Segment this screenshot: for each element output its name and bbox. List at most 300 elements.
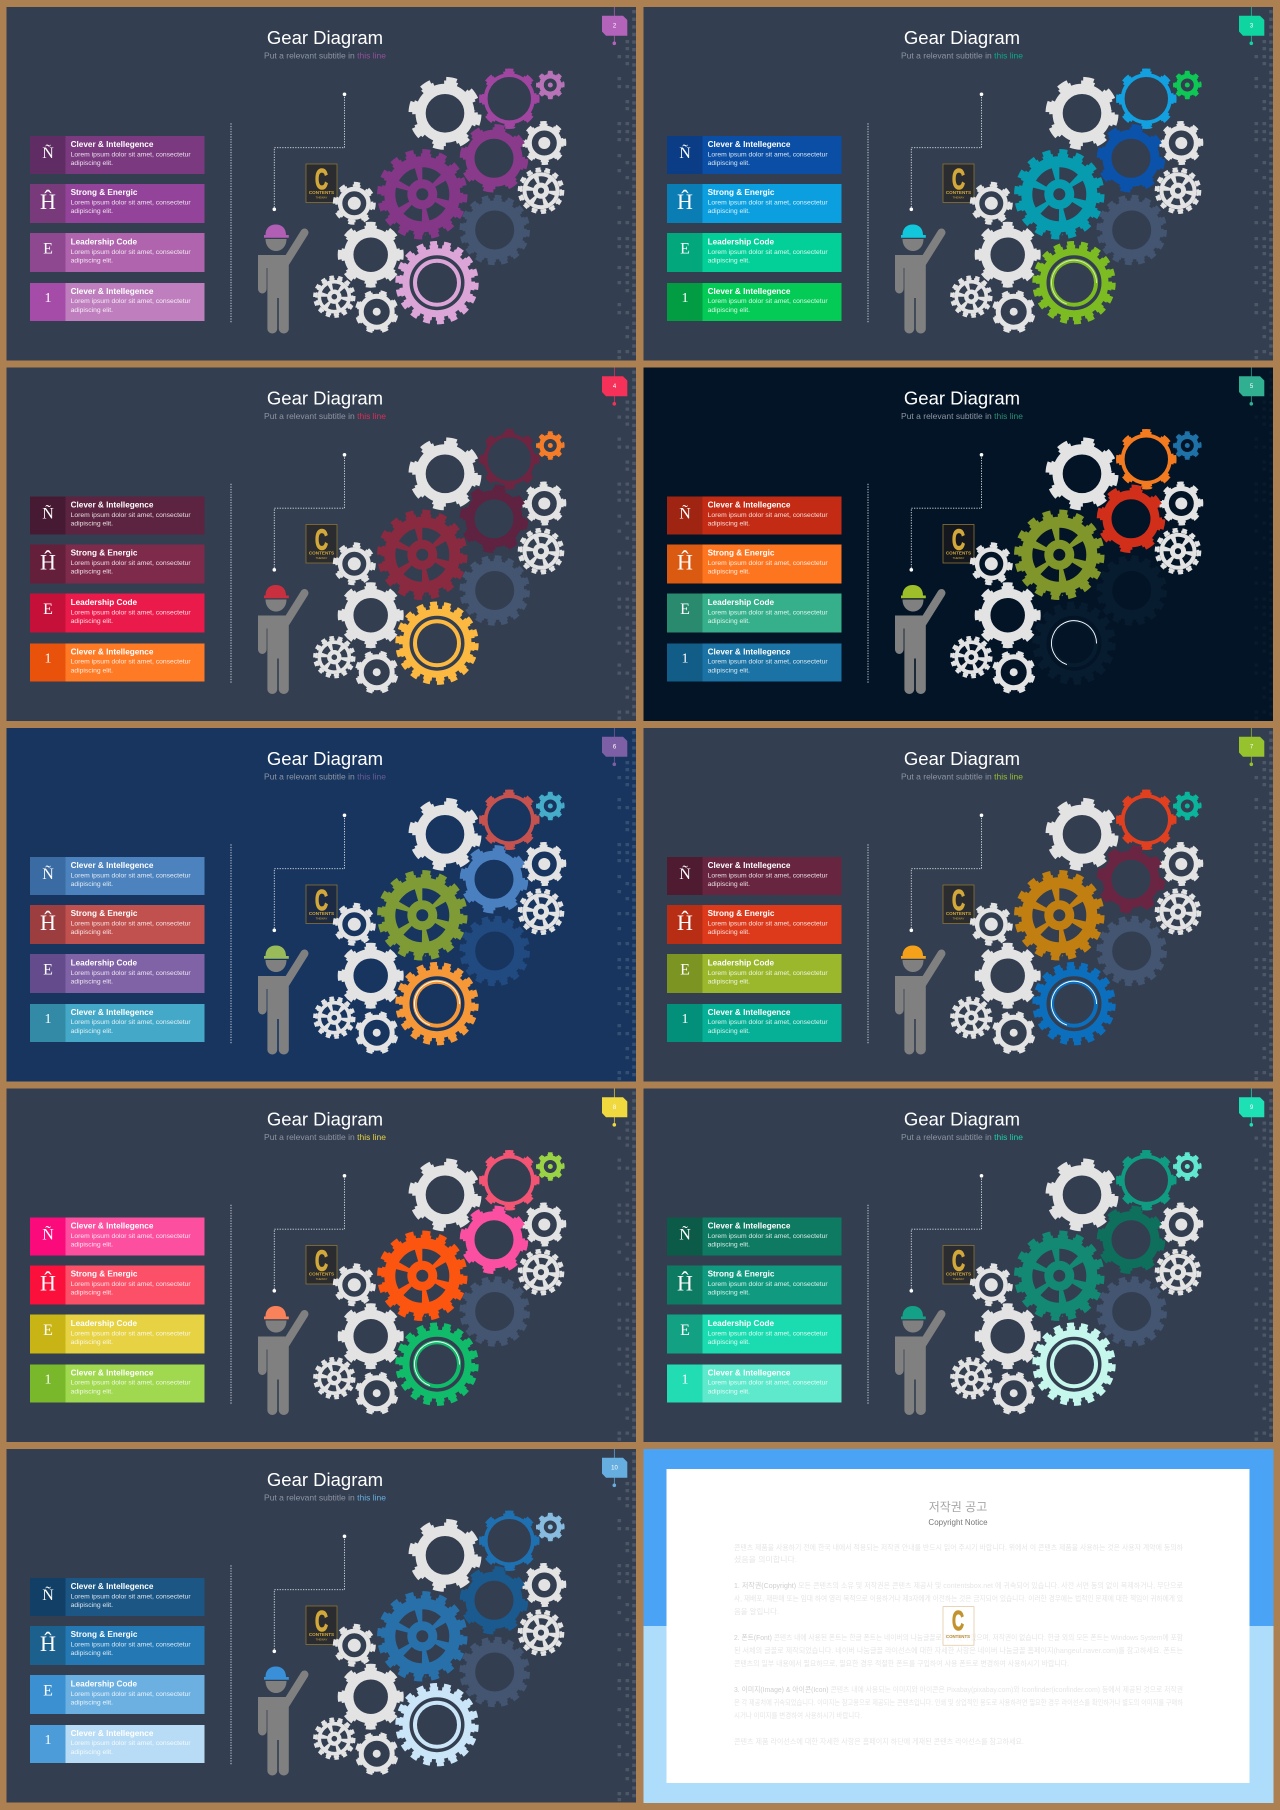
title: Gear Diagram [267, 1469, 383, 1490]
list item 3: adipiscing elit. [708, 1339, 750, 1346]
slide background [6, 728, 636, 1082]
notice body text: 셨음을 의미합니다. [734, 1554, 797, 1564]
centre logo: CONTENTS [946, 1634, 970, 1639]
list item 2 [30, 905, 204, 944]
dotted divider and leader [231, 814, 346, 1044]
list item 2: Strong & Energic [71, 1270, 138, 1278]
list item 1: Ñ [679, 504, 691, 522]
list item 4: 1 [44, 1372, 52, 1388]
list item 1: Clever & Intellegence [71, 1222, 154, 1230]
list item 1: adipiscing elit. [71, 160, 113, 167]
list item 1: adipiscing elit. [708, 1242, 750, 1248]
white notice card [666, 1469, 1250, 1783]
list item 1: Ñ [42, 1586, 54, 1604]
list item 4: Lorem ipsum dolor sit amet, consectetur [708, 1019, 828, 1026]
list item 4: Lorem ipsum dolor sit amet, consectetur [71, 298, 191, 305]
list item 2: Lorem ipsum dolor sit amet, consectetur [71, 920, 191, 928]
list item 3: adipiscing elit. [71, 1339, 113, 1346]
slide background [6, 368, 636, 721]
list item 4: adipiscing elit. [71, 1389, 113, 1396]
list item 1: adipiscing elit. [708, 881, 750, 888]
list item 4: Clever & Intellegence [708, 648, 791, 656]
panel: slide 2 purple [6, 7, 636, 360]
list item 2: adipiscing elit. [71, 1290, 113, 1296]
logo: CONTENTS [309, 550, 334, 556]
list item 1: Ñ [679, 1226, 691, 1244]
list item 3: Lorem ipsum dolor sit amet, consectetur [71, 609, 191, 616]
list item 3: Leadership Code [708, 598, 774, 607]
list item 3: Leadership Code [708, 958, 774, 967]
list item 3: adipiscing elit. [708, 618, 750, 625]
logo: THEWAY [953, 916, 964, 920]
list item 1 [30, 1578, 204, 1616]
subtitle: Put a relevant subtitle in this line [264, 1492, 386, 1502]
gear cluster [315, 1149, 567, 1417]
list item 1: Ñ [679, 865, 691, 883]
list item 2: Strong & Energic [71, 548, 138, 558]
list item 3: adipiscing elit. [71, 618, 113, 625]
list item 2: Lorem ipsum dolor sit amet, consectetur [708, 920, 828, 928]
slide background [644, 728, 1273, 1082]
list item 3: adipiscing elit. [71, 1700, 113, 1706]
list item 4: 1 [44, 1733, 52, 1748]
list item 4 [667, 1004, 842, 1042]
subtitle: Put a relevant subtitle in this line [901, 50, 1023, 60]
list item 1: Ñ [42, 504, 54, 522]
list item 3: E [43, 962, 53, 978]
list item 3: Lorem ipsum dolor sit amet, consectetur [71, 249, 191, 256]
page tag: 5 [1250, 384, 1254, 390]
list item 3: adipiscing elit. [71, 978, 113, 986]
worker figure with hard hat [258, 1666, 304, 1776]
list item 4: adipiscing elit. [708, 668, 750, 675]
notice body text: 음을 알립니다. [734, 1607, 779, 1616]
list item 2 [667, 905, 842, 944]
list item 4: Clever & Intellegence [708, 1008, 791, 1017]
list item 3 [667, 233, 842, 272]
notice body text [734, 1542, 1183, 1746]
panel: slide 9 teal [644, 1088, 1273, 1442]
logo: C [315, 1246, 328, 1278]
logo: C [952, 524, 965, 556]
list item 4: Lorem ipsum dolor sit amet, consectetur [71, 1019, 191, 1026]
page tag: 9 [1250, 1105, 1254, 1111]
slide background [6, 1449, 636, 1802]
list item 1 [667, 496, 842, 534]
list item 4: adipiscing elit. [71, 668, 113, 675]
list item 2 [667, 184, 842, 223]
list item 1: Clever & Intellegence [71, 1582, 154, 1591]
list item 4: adipiscing elit. [71, 307, 113, 314]
gear cluster [315, 67, 567, 335]
list item 2: Strong & Energic [708, 548, 775, 558]
list item 4 [30, 283, 204, 321]
notice body text: 2. 폰트(Font) 콘텐츠 내에 사용된 폰트는 한글 폰트는 네이버의 나눔글꼴로 제작되어 있으며, 저작권이 없습니다. 한글 외의 모든 폰트는 Windows System에 포함 [734, 1632, 1183, 1642]
logo: CONTENTS [946, 911, 971, 916]
list item 1: Clever & Intellegence [71, 140, 154, 149]
list item 2: Strong & Energic [71, 909, 138, 918]
list item 4: 1 [44, 652, 52, 666]
list item 3 [30, 233, 204, 272]
worker figure with hard hat [258, 585, 304, 694]
dot pattern [618, 370, 634, 720]
subtitle: Put a relevant subtitle in this line [901, 411, 1023, 421]
list item 2: Ĥ [40, 550, 56, 574]
list item 1 [667, 1218, 842, 1256]
list item 3: Leadership Code [708, 1319, 774, 1328]
list item 4: Lorem ipsum dolor sit amet, consectetur [71, 1380, 191, 1387]
worker figure with hard hat [258, 224, 304, 334]
list item 4: Lorem ipsum dolor sit amet, consectetur [708, 659, 828, 666]
gear cluster [952, 1149, 1204, 1417]
list item 2: adipiscing elit. [708, 929, 750, 936]
list item 2: Ĥ [677, 189, 693, 214]
list item 3: E [680, 240, 690, 258]
slide background [644, 1088, 1273, 1442]
list item 4: adipiscing elit. [71, 1028, 113, 1035]
list item 2: Strong & Energic [71, 1630, 138, 1639]
list item 2 [30, 1266, 204, 1304]
list item 2 [667, 1266, 842, 1304]
list item 1 [30, 496, 204, 534]
list item 1: Clever & Intellegence [708, 500, 791, 510]
worker figure with hard hat [258, 1306, 304, 1415]
list item 1: adipiscing elit. [708, 520, 750, 528]
logo: CONTENTS [309, 190, 334, 195]
list item 3: adipiscing elit. [708, 258, 750, 264]
list item 2 [30, 1626, 204, 1665]
list item 2: Lorem ipsum dolor sit amet, consectetur [71, 560, 191, 567]
list item 2: Lorem ipsum dolor sit amet, consectetur [71, 1281, 191, 1288]
title: Gear Diagram [267, 748, 383, 769]
title: Gear Diagram [904, 1108, 1020, 1130]
notice heading: 저작권 공고 [929, 1500, 987, 1514]
list item 1: Lorem ipsum dolor sit amet, consectetur [71, 152, 191, 158]
subtitle: Put a relevant subtitle in this line [264, 411, 386, 421]
list item 4: Clever & Intellegence [71, 1368, 154, 1378]
panel: slide 6 royal blue [6, 728, 636, 1082]
list item 2: Ĥ [677, 910, 693, 935]
list item 2: Ĥ [40, 910, 56, 935]
list item 3: Leadership Code [71, 237, 137, 246]
list item 3: E [43, 601, 53, 618]
dotted divider and leader [868, 92, 983, 323]
list item 3: Leadership Code [71, 1679, 137, 1688]
list item 3: E [680, 1322, 690, 1339]
list item 1 [30, 857, 204, 895]
list item 4: 1 [682, 1012, 688, 1027]
list item 4: Clever & Intellegence [708, 287, 791, 296]
list item 4: 1 [682, 1372, 688, 1388]
list item 4 [667, 1364, 842, 1402]
list item 1: adipiscing elit. [71, 1602, 113, 1609]
list item 3: Leadership Code [71, 1319, 137, 1328]
list item 2: Ĥ [677, 550, 693, 574]
title: Gear Diagram [904, 748, 1020, 769]
list item 1: adipiscing elit. [71, 881, 113, 888]
panel: slide 10 blue [6, 1449, 636, 1802]
list item 2: Lorem ipsum dolor sit amet, consectetur [708, 200, 828, 206]
list item 1: Ñ [42, 865, 54, 883]
page tag: 7 [1250, 744, 1254, 750]
dotted divider and leader [231, 453, 346, 683]
logo [306, 1606, 337, 1644]
list item 4: Lorem ipsum dolor sit amet, consectetur [708, 298, 828, 305]
logo: C [315, 885, 328, 917]
list item 2 [30, 184, 204, 223]
dotted divider and leader [868, 453, 983, 683]
list item 1: Lorem ipsum dolor sit amet, consectetur [708, 512, 828, 519]
logo: CONTENTS [946, 550, 971, 556]
page tag [1239, 368, 1264, 406]
title: Gear Diagram [267, 27, 383, 48]
list item 3 [667, 594, 842, 632]
list item 4: Clever & Intellegence [708, 1368, 791, 1378]
subtitle: Put a relevant subtitle in this line [264, 1132, 386, 1142]
logo [306, 164, 337, 202]
logo: CONTENTS [309, 911, 334, 916]
list item 1: Clever & Intellegence [708, 140, 791, 149]
page tag: 2 [613, 24, 617, 30]
list item 3 [667, 954, 842, 993]
list item 4: Lorem ipsum dolor sit amet, consectetur [71, 659, 191, 666]
dot pattern [1254, 1092, 1271, 1441]
page tag [602, 1449, 627, 1487]
dotted divider and leader [231, 1534, 346, 1765]
page tag: 4 [613, 384, 617, 390]
list item 3: Lorem ipsum dolor sit amet, consectetur [708, 1330, 828, 1337]
list item 1: Lorem ipsum dolor sit amet, consectetur [71, 512, 191, 519]
list item 2: Ĥ [677, 1270, 693, 1296]
logo [943, 164, 974, 202]
list item 4 [30, 1004, 204, 1042]
panel: slide 8 vivid [6, 1088, 636, 1442]
list item 3: E [680, 962, 690, 978]
worker figure with hard hat [895, 946, 942, 1054]
gear cluster [952, 428, 1204, 696]
page tag: 10 [611, 1466, 618, 1472]
list item 3 [30, 1675, 204, 1714]
notice body text: 1. 저작권(Copyright) 모든 콘텐츠의 소유 및 저작권은 콘텐츠 제공사 및 contentsbox.net 에 귀속되어 있습니다. 사전 서면 동의 없이 복제하거나, 무단으로 [734, 1580, 1183, 1590]
logo: CONTENTS [946, 1272, 971, 1276]
list item 3: Leadership Code [71, 958, 137, 967]
page tag: 8 [613, 1105, 617, 1111]
list item 1: adipiscing elit. [71, 1242, 113, 1248]
list item 4 [667, 283, 842, 321]
list item 4 [30, 1364, 204, 1402]
list item 3: Lorem ipsum dolor sit amet, consectetur [708, 970, 828, 977]
list item 3: adipiscing elit. [708, 978, 750, 986]
slide background [644, 368, 1273, 721]
dotted divider and leader [868, 1174, 983, 1404]
list item 2: Lorem ipsum dolor sit amet, consectetur [71, 1642, 191, 1648]
list item 2: adipiscing elit. [71, 929, 113, 936]
worker figure with hard hat [895, 224, 942, 334]
list item 3: E [680, 601, 690, 618]
worker figure with hard hat [258, 946, 304, 1054]
slide background [6, 1088, 636, 1442]
list item 3: adipiscing elit. [71, 258, 113, 264]
list item 3: Lorem ipsum dolor sit amet, consectetur [71, 970, 191, 977]
list item 3: Lorem ipsum dolor sit amet, consectetur [71, 1691, 191, 1698]
list item 2: Ĥ [40, 189, 56, 214]
list item 3: Leadership Code [708, 237, 774, 246]
list item 4 [667, 644, 842, 682]
background lower light blue [644, 1626, 1274, 1803]
list item 1: adipiscing elit. [71, 520, 113, 528]
logo: CONTENTS [309, 1632, 334, 1637]
gear cluster [952, 67, 1204, 335]
list item 2: Lorem ipsum dolor sit amet, consectetur [708, 1281, 828, 1288]
list item 1: Clever & Intellegence [708, 1222, 791, 1230]
list item 1: Clever & Intellegence [71, 500, 154, 510]
list item 3 [30, 594, 204, 632]
list item 1 [667, 857, 842, 895]
gear cluster [315, 1509, 567, 1777]
list item 2 [667, 544, 842, 584]
list item 4: 1 [682, 291, 688, 306]
dot pattern [618, 731, 634, 1080]
notice body text: 콘텐츠 제품을 사용하기 전에 한국 내에서 적용되는 저작권 안내를 반드시 읽어 주시기 바랍니다. 위에서 이 콘텐츠 제품을 사용하는 것은 사용자 계약에 동의하 [734, 1542, 1183, 1552]
dot pattern [1254, 731, 1271, 1080]
list item 4: 1 [44, 1012, 52, 1027]
panel: slide 4 crimson [6, 368, 636, 721]
dot pattern [618, 1452, 634, 1801]
list item 3: E [43, 1682, 53, 1700]
list item 2: Strong & Energic [708, 188, 775, 197]
slide background [6, 7, 636, 360]
list item 3 [30, 954, 204, 993]
list item 1: Lorem ipsum dolor sit amet, consectetur [71, 1594, 191, 1600]
list item 3: E [43, 1322, 53, 1339]
list item 4: Clever & Intellegence [71, 648, 154, 656]
notice body text: 된 서체의 글꼴로 제작되었습니다. 네이버 나눔글꼴 라이선스에 대한 자세한 사항은 네이버 나눔글꼴 홈페이지(hangeul.naver.com)를 참고하세요. 폰트는 [734, 1645, 1183, 1655]
dot pattern [1254, 10, 1271, 359]
page tag [602, 1088, 627, 1127]
notice subheading: Copyright Notice [928, 1518, 988, 1527]
subtitle: Put a relevant subtitle in this line [901, 1132, 1023, 1142]
list item 1: Lorem ipsum dolor sit amet, consectetur [708, 1233, 828, 1240]
list item 1: Clever & Intellegence [708, 861, 791, 870]
list item 3: E [43, 240, 53, 258]
panel: copyright notice [644, 1449, 1274, 1803]
logo: C [952, 1246, 965, 1278]
list item 4: adipiscing elit. [708, 1028, 750, 1035]
logo [306, 524, 337, 563]
logo [943, 1246, 974, 1284]
notice body text: 은 각 제공처에 귀속되었습니다. 이미지는 참고용으로 제공되는 콘텐츠입니다. 인쇄 및 상업적인 용도로 사용하려면 필요한 경우 라이선스를 확인하거나 별도의 이미지를 구매하 [734, 1697, 1183, 1707]
page tag [1239, 728, 1264, 766]
logo: THEWAY [316, 1637, 327, 1641]
list item 1: Clever & Intellegence [71, 861, 154, 870]
title: Gear Diagram [267, 1108, 383, 1130]
list item 4: 1 [44, 291, 52, 306]
worker figure with hard hat [895, 1306, 942, 1415]
gear cluster [952, 788, 1204, 1056]
list item 2 [30, 544, 204, 584]
list item 4: adipiscing elit. [708, 307, 750, 314]
logo: C [952, 164, 965, 196]
list item 4 [30, 644, 204, 682]
logo: C [952, 885, 965, 917]
list item 2: Strong & Energic [708, 909, 775, 918]
list item 1: Lorem ipsum dolor sit amet, consectetur [708, 872, 828, 880]
logo: THEWAY [953, 556, 964, 560]
page tag: 3 [1250, 24, 1254, 30]
worker figure with hard hat [895, 585, 942, 694]
list item 3: Leadership Code [71, 598, 137, 607]
title: Gear Diagram [904, 388, 1020, 408]
logo: THEWAY [316, 556, 327, 560]
logo [943, 524, 974, 563]
list item 4: Clever & Intellegence [71, 1008, 154, 1017]
list item 1 [667, 136, 842, 174]
list item 4: Lorem ipsum dolor sit amet, consectetur [708, 1380, 828, 1387]
list item 2: Ĥ [40, 1631, 56, 1656]
list item 4: Lorem ipsum dolor sit amet, consectetur [71, 1740, 191, 1747]
list item 2: Lorem ipsum dolor sit amet, consectetur [71, 200, 191, 206]
gear cluster [315, 428, 567, 696]
list item 4: 1 [682, 652, 688, 666]
panel: slide 7 mixed warm [644, 728, 1273, 1082]
title: Gear Diagram [267, 388, 383, 408]
list item 2: adipiscing elit. [708, 1290, 750, 1296]
background upper blue [644, 1449, 1274, 1626]
list item 4: adipiscing elit. [71, 1749, 113, 1756]
dot pattern [618, 10, 634, 359]
page tag [602, 728, 627, 766]
logo: THEWAY [953, 195, 964, 199]
subtitle: Put a relevant subtitle in this line [901, 772, 1023, 782]
logo: THEWAY [316, 916, 327, 920]
slide background [644, 7, 1273, 360]
page tag [602, 7, 627, 45]
list item 1: Lorem ipsum dolor sit amet, consectetur [71, 1233, 191, 1240]
list item 2: Ĥ [40, 1270, 56, 1296]
list item 1: adipiscing elit. [708, 160, 750, 167]
logo: C [315, 1606, 328, 1638]
list item 2: Lorem ipsum dolor sit amet, consectetur [708, 560, 828, 567]
list item 3: Lorem ipsum dolor sit amet, consectetur [708, 249, 828, 256]
list item 2: adipiscing elit. [71, 208, 113, 215]
centre logo [943, 1605, 974, 1645]
list item 2: adipiscing elit. [708, 208, 750, 215]
logo: CONTENTS [309, 1272, 334, 1276]
list item 4: adipiscing elit. [708, 1389, 750, 1396]
list item 4: Clever & Intellegence [71, 287, 154, 296]
page tag [602, 368, 627, 406]
list item 2: adipiscing elit. [71, 568, 113, 576]
dot pattern [1254, 370, 1271, 720]
logo: C [315, 164, 328, 196]
list item 1: Ñ [42, 1226, 54, 1244]
notice body text: 3. 이미지(Image) & 아이콘(Icon) 콘텐츠 내에 사용되는 이미지와 아이콘은 Pixabay(pixabay.com)와 Iconfinder(iconfinder.com) 등에서 제공된 것으로 저작권 [734, 1684, 1183, 1694]
logo: C [315, 524, 328, 556]
dotted divider and leader [868, 814, 983, 1044]
page tag: 6 [613, 744, 617, 750]
list item 2: adipiscing elit. [71, 1650, 113, 1657]
centre logo: C [952, 1605, 964, 1636]
page tag [1239, 1088, 1264, 1127]
logo: THEWAY [316, 1277, 327, 1281]
subtitle: Put a relevant subtitle in this line [264, 50, 386, 60]
list item 4: Clever & Intellegence [71, 1729, 154, 1738]
logo: THEWAY [953, 1277, 964, 1281]
notice body text: 콘텐츠의 일부 내용에서 필요하므로, 필요한 경우 적절한 폰트를 구입하여 사용 폰트로 변경하여 사용하시기 바랍니다. [734, 1658, 1069, 1668]
list item 2: Strong & Energic [708, 1270, 775, 1278]
list item 2: Strong & Energic [71, 188, 138, 197]
dotted divider and leader [231, 1174, 346, 1404]
